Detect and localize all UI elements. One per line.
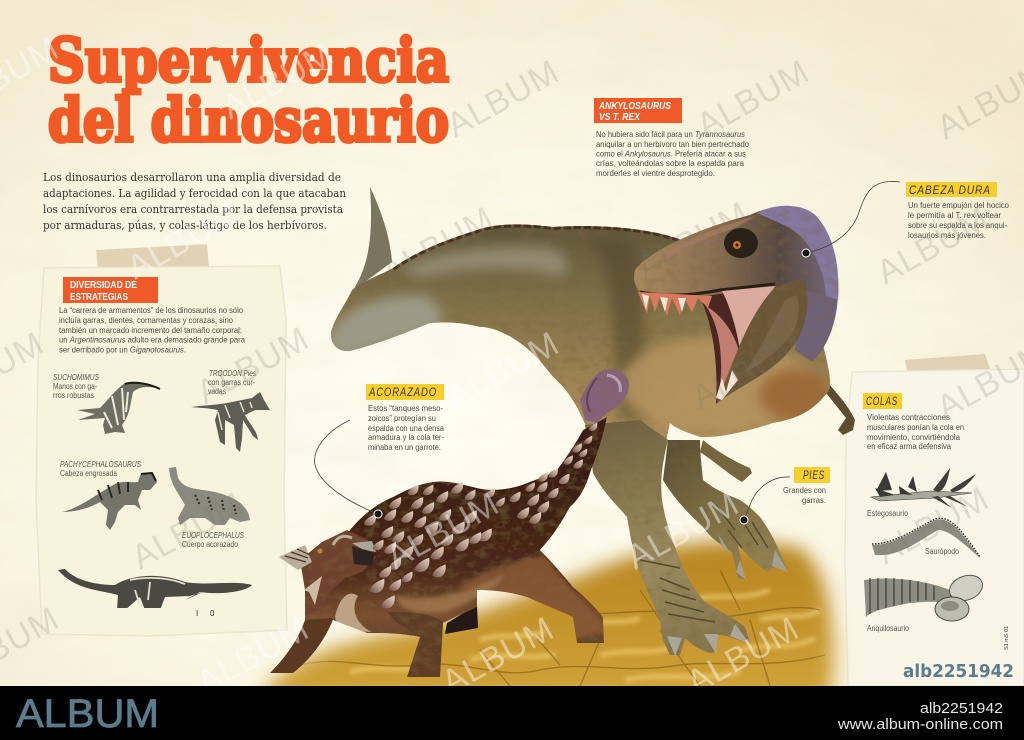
panel heading: ESTRATEGIAS (70, 291, 128, 303)
tail club (580, 369, 629, 423)
belly tan (620, 337, 810, 433)
intro text: los carnívoros era contrarrestada por la defensa provista (43, 202, 343, 216)
tape (905, 354, 991, 382)
engraving: ankylosaurus tail (864, 571, 986, 633)
watermarks: ALBUM (190, 610, 316, 702)
lower jaw (716, 278, 808, 404)
callout: pies: PIES (803, 470, 825, 482)
callout: ankylosaurus vs t. rex: crías, volteándolas sobre la espalda para (596, 158, 744, 168)
ground (253, 528, 848, 686)
watermarks: ALBUM (630, 195, 756, 287)
callout: ankylosaurus vs t. rex: aniquilar a un herbívoro tan bien pertrechado (596, 139, 749, 149)
far arm (825, 385, 855, 435)
panel text: un Argentinosaurus adulto era demasiado grande para (59, 334, 245, 344)
near leg stripes (640, 560, 715, 622)
footer url: www.album-online.com (837, 716, 1003, 733)
panel heading: COLAS (866, 396, 898, 408)
engraving: troodon: TROODON Pies (209, 369, 256, 378)
horn (333, 536, 352, 545)
intro text: Los dinosaurios desarrollaron una amplia diversidad de (43, 170, 341, 184)
panel paper (845, 369, 1024, 686)
ground cracks (300, 570, 825, 686)
engraving: suchomimus: rros robustas (53, 391, 94, 400)
callout: cabeza dura: Un fuerte empujón del hocico (908, 200, 1009, 210)
belly band (395, 574, 505, 613)
engraving: troodon: vadas (208, 387, 226, 396)
callout: pies: Grandes con (783, 485, 826, 495)
panel text: en eficaz arma defensiva (867, 441, 951, 451)
engraving: suchomimus (53, 373, 160, 434)
watermarks: ALBUM (440, 53, 566, 145)
intro text: adaptaciones. La agilidad y ferocidad con la que atacaban (43, 186, 346, 200)
callout: cabeza dura: CABEZA DURA (909, 185, 991, 197)
engraving: pachycephalosaurus: Cabeza engrosada (60, 469, 117, 478)
eye (318, 548, 322, 554)
leader line (806, 181, 900, 253)
cheek plate (304, 576, 322, 605)
callout: ankylosaurus vs t. rex: como el Ankylosaurus. Prefería atacar a sus (596, 148, 746, 158)
tail fin (352, 187, 392, 292)
far foot claws (718, 534, 788, 580)
lip line (640, 284, 775, 295)
engraving: pachycephalosaurus: PACHYCEPHALOSAURUS (60, 460, 142, 469)
watermarks: ALBUM (375, 200, 501, 292)
callout: ankylosaurus vs t. rex: ANKYLOSAURUS (598, 100, 671, 112)
small arm (700, 440, 752, 482)
engraving: troodon (191, 369, 270, 452)
head (634, 207, 838, 300)
purple crown (757, 206, 838, 300)
teeth (638, 292, 712, 316)
ground highlights (350, 590, 820, 680)
callout: ankylosaurus vs t. rex: morderles el vientre desprotegido. (596, 168, 715, 178)
callout: pies: garras. (802, 495, 826, 505)
callout: acorazado (315, 384, 444, 518)
near leg (585, 420, 750, 655)
tail and trunk (330, 224, 830, 439)
engraving: euoplocephalus (169, 467, 250, 549)
callout: cabeza dura (802, 181, 1009, 257)
mouth (352, 546, 375, 566)
footer code: alb2251942 (920, 700, 1003, 717)
panel text: La “carrera de armamentos” de los dinosaurios no sólo (59, 305, 243, 315)
head (279, 530, 376, 615)
t. rex (325, 187, 855, 656)
watermarks: ALBUM (690, 53, 816, 145)
page number: 0 (210, 609, 215, 618)
neck rear purple (795, 290, 838, 362)
back silver highlight (400, 246, 568, 278)
callout: cabeza dura: le permitía al T. rex voltear (908, 210, 1001, 220)
panel: colas (845, 354, 1024, 686)
tape (96, 244, 209, 270)
engraving: suchomimus: SUCHOMIMUS (53, 373, 100, 382)
far foot stripes (716, 505, 768, 548)
armour spikes (364, 423, 597, 608)
mouth (700, 286, 775, 404)
watermarks: ALBUM (120, 195, 246, 287)
panel paper (36, 266, 287, 636)
watermarks: ALBUM (190, 320, 316, 412)
image code stamp: alb2251942 (903, 661, 1014, 682)
far leg (663, 440, 788, 580)
lower jaw light (745, 295, 799, 372)
engraving: sauropod (58, 569, 252, 610)
far hind leg (445, 605, 478, 634)
beak (352, 541, 376, 552)
engraving: euoplocephalus: Cuerpo acorazado (182, 540, 238, 549)
callout: acorazado: ACORAZADO (368, 387, 437, 399)
watermarks: ALBUM (435, 610, 561, 702)
tooth tips (642, 294, 738, 400)
engraving: troodon: con garras cur- (208, 378, 255, 387)
callout: acorazado: armadura y la cola ter- (368, 432, 444, 442)
callout: pies (740, 467, 830, 524)
chest tawny (759, 369, 831, 421)
intro text (43, 170, 346, 232)
engraving: ankylosaurus tail: Anquilosaurio (867, 624, 909, 633)
callout: acorazado: espalda con una densa (368, 423, 444, 433)
back ridge (393, 224, 682, 268)
engraving: sauropod tail: Saurópodo (925, 547, 959, 556)
legs shading (388, 612, 445, 677)
engraving: stegosaurus tail: Estegosaurio (867, 509, 908, 518)
watermarks: ALBUM (215, 35, 341, 127)
callout: ankylosaurus vs t. rex: VS T. REX (599, 111, 641, 123)
near leg claws (667, 624, 750, 656)
small vertical page mark: S1 mS 01 (1004, 626, 1010, 650)
engraving: sauropod tail (872, 518, 980, 558)
panel text: incluía garras, dientes, cornamentas y corazas, sino (59, 315, 233, 325)
panel text: movimiento, convirtiéndola (867, 432, 960, 442)
page number (196, 609, 215, 618)
panel text (59, 305, 245, 354)
watermarks: ALBUM (125, 485, 251, 577)
engraving: pachycephalosaurus (60, 460, 157, 530)
footer logo: ALBUM (16, 692, 159, 736)
eye (724, 228, 758, 258)
ankylosaurus (270, 369, 629, 677)
page number: I (196, 609, 198, 618)
crest stripes (285, 549, 310, 562)
panel text: musculares ponían la cola en (867, 422, 964, 432)
engraving: euoplocephalus: EUOPLOCEPHALUS (182, 531, 245, 540)
panel heading (863, 393, 902, 409)
tail and body (270, 417, 607, 677)
trunk shade (598, 240, 650, 424)
callout: acorazado: zoicos” protegían su (368, 413, 436, 423)
leader line (315, 420, 378, 514)
callout: acorazado: minaba en un garrote. (368, 442, 441, 452)
panel heading (63, 277, 158, 303)
panel: diversidad de estrategias (36, 244, 287, 636)
callout: ankylosaurus vs t. rex (594, 98, 749, 178)
watermarks: ALBUM (620, 485, 746, 577)
callout: acorazado: Estos “tanques meso- (368, 403, 443, 413)
watermarks: ALBUM (380, 485, 506, 577)
callout: ankylosaurus vs t. rex: No hubiera sido fácil para un Tyrannosaurus (596, 129, 746, 139)
panel heading: DIVERSIDAD DE (70, 279, 137, 291)
snout pink top (665, 216, 755, 258)
watermarks: ALBUM (870, 480, 996, 572)
footer bar (0, 686, 1024, 740)
flank light (455, 555, 606, 640)
panel text: Violentas contracciones (867, 412, 950, 422)
title: del dinosaurio (48, 86, 449, 156)
watermarks: ALBUM (685, 325, 811, 417)
panel text (867, 412, 964, 451)
intro text: por armaduras, púas, y colas-látigo de los herbívoros. (43, 218, 327, 232)
callout: cabeza dura: sobre su espalda a los anqui- (908, 220, 1007, 230)
throat (335, 594, 372, 632)
callout: cabeza dura: losaurios más jóvenes. (908, 230, 986, 240)
crest frill (279, 545, 312, 570)
engraving: suchomimus: Manos con ga- (53, 382, 97, 391)
tail grey wash (325, 295, 443, 360)
watermarks: ALBUM (680, 610, 806, 702)
watermarks: ALBUM (870, 200, 996, 292)
panel text: también un marcado incremento del tamaño corporal: (59, 325, 242, 335)
watermarks: ALBUM (440, 325, 566, 417)
panel text: ser derribado por un Giganotosaurus. (59, 344, 186, 354)
title (48, 26, 449, 156)
title: Supervivencia (48, 26, 449, 96)
engraving: stegosaurus tail (867, 468, 976, 518)
leader line (744, 477, 790, 520)
